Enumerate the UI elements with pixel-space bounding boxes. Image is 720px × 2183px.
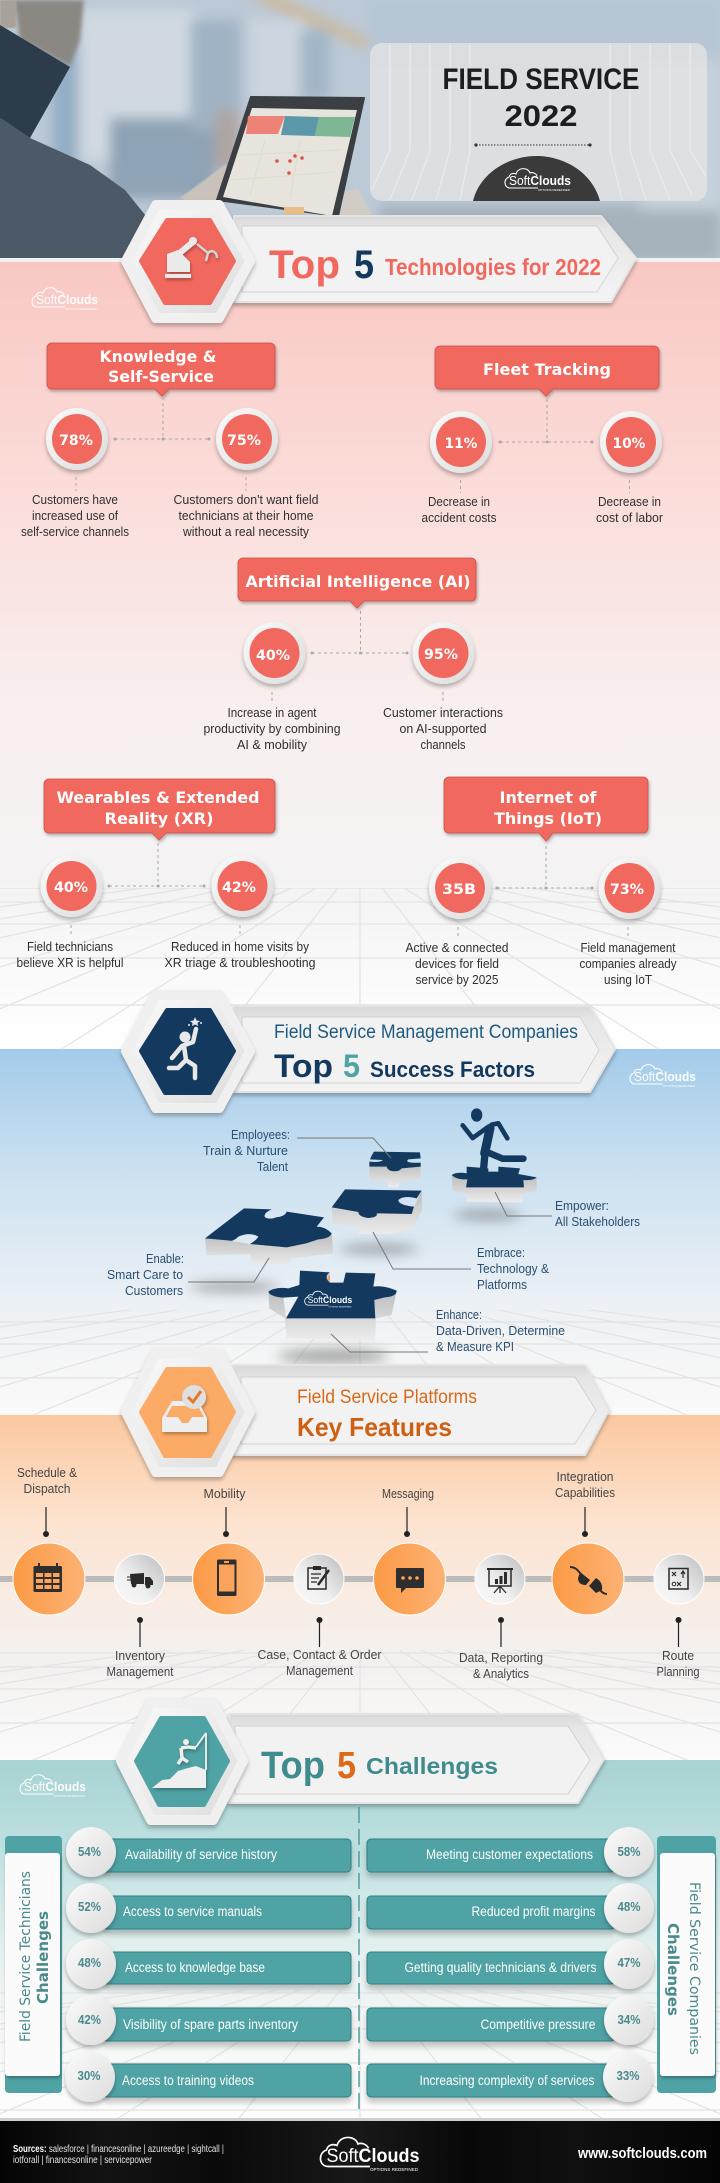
feature: Mobility: Mobility: [204, 1486, 246, 1501]
label: Enable: Enable:: [146, 1251, 184, 1266]
banner: Top 5 Success Factors: [126, 995, 615, 1108]
sources: Sources: salesforce | financesonline | azureedge | sightcall |: [13, 2144, 224, 2155]
label: Enhance: [331, 1307, 565, 1354]
ribbon: Challenges: [366, 1753, 498, 1779]
description 10%: [596, 494, 664, 525]
ribbon: Success Factors: [370, 1057, 535, 1082]
feature: Data, Reporting & Analytics: Data, Reporting: [459, 1650, 543, 1665]
tablet: [217, 97, 364, 216]
technicians challenge 52%: Access to service manuals: [123, 1904, 262, 1919]
stat 11%: [430, 411, 492, 473]
stat 35B: 35B: [442, 882, 476, 898]
feature: Case, Contact & Order Management: Case, Contact & Order: [258, 1647, 382, 1662]
feature: Messaging: [374, 1486, 446, 1615]
shadows: [190, 1210, 521, 1363]
label: Embrace: Embrace:: [477, 1245, 525, 1260]
feature: Case, Contact & Order Management: [258, 1554, 382, 1678]
logo: SoftClouds footer: SoftClouds: [326, 2145, 420, 2167]
label: Enable: Customers: [125, 1283, 183, 1298]
description 11%: [422, 494, 497, 525]
logo on puzzle piece: OPTIONS REDEFINED: [328, 1306, 352, 1308]
sources: [13, 2144, 224, 2166]
description 95%: on AI-supported: [400, 721, 486, 736]
technicians challenge 30%: Access to training videos: [122, 2073, 254, 2088]
companies challenge 34%: 34%: [618, 2012, 641, 2027]
side panel: Field Service Technicians Challenges: Field Service Technicians: [18, 1871, 34, 2042]
feature: Integration Capabilities: Integration: [556, 1469, 614, 1484]
description 73%: [580, 940, 677, 987]
side panel: Field Service Technicians Challenges: [5, 1836, 62, 2093]
description 10%: cost of labor: [596, 510, 664, 525]
label: Embrace: Technology &: [477, 1261, 549, 1276]
stat 40%: [244, 622, 306, 684]
callout heading: Internet of: [500, 788, 598, 807]
logo: SoftClouds section 2: [630, 1065, 696, 1088]
technicians challenge 48%: 48%: [78, 1955, 101, 1970]
logo on puzzle piece: SoftClouds: [308, 1295, 352, 1305]
companies challenge 33%: [367, 2052, 653, 2102]
feature: Inventory Management: Inventory: [115, 1648, 165, 1663]
description 42%: Reduced in home visits by: [171, 939, 309, 954]
description 42%: [164, 939, 316, 970]
ribbon: [234, 216, 636, 302]
side panel: Field Service Companies Challenges: Challenges: [664, 1923, 682, 2016]
label: Enhance: Data-Driven, Determine: [436, 1323, 565, 1338]
hexagon badge with inbox icon: [126, 1353, 250, 1472]
panel: Internet of Things: [406, 777, 677, 987]
companies challenge 48%: Reduced profit margins: [472, 1904, 596, 1919]
feature: Route Planning: [654, 1554, 704, 1679]
companies challenge 33%: Increasing complexity of services: [420, 2073, 595, 2088]
feature: Inventory Management: Management: [106, 1664, 174, 1679]
stat 42%: [212, 855, 274, 917]
logo: SoftClouds section 1: [32, 288, 98, 311]
callout heading: [435, 346, 659, 396]
logo: SoftClouds section 4: SoftClouds: [24, 1779, 86, 1794]
stat 75%: 75%: [227, 433, 261, 449]
feature: Inventory Management: [106, 1554, 174, 1679]
technicians challenge 42%: [66, 1995, 351, 2045]
puzzle piece: Enable: [205, 1208, 333, 1266]
ribbon: Top: [261, 1745, 325, 1787]
companies challenge 58%: [367, 1827, 654, 1877]
feature: Data, Reporting & Analytics: & Analytics: [473, 1666, 529, 1681]
description 35B: Active & connected: [406, 940, 508, 955]
callout heading: Wearables & Extended: [56, 788, 260, 807]
feature: Integration Capabilities: Capabilities: [555, 1485, 615, 1500]
callout heading: Self-Service: [108, 367, 214, 386]
center dashed divider: [358, 1807, 360, 2112]
stat 10%: 10%: [612, 436, 646, 452]
callout heading: Things (IoT): [494, 809, 602, 828]
feature: Data, Reporting & Analytics: [459, 1554, 543, 1681]
side panel: Field Service Companies Challenges: [657, 1836, 716, 2093]
description 78%: increased use of: [32, 508, 118, 523]
companies challenge 48%: 48%: [618, 1899, 641, 1914]
label: Employees: Talent: [257, 1159, 288, 1174]
callout heading: [238, 558, 476, 608]
puzzle piece: Empower with running figure: [452, 1108, 537, 1203]
ribbon: Key Features: [297, 1412, 452, 1442]
person: [0, 0, 372, 258]
feature: Case, Contact & Order Management: Management: [286, 1663, 353, 1678]
companies challenge 34%: [367, 1995, 654, 2045]
stat 78%: 78%: [59, 433, 93, 449]
feature: Schedule & Dispatch: [13, 1465, 85, 1615]
technicians challenge 48%: [66, 1939, 351, 1989]
logo: SoftClouds section 1: SoftClouds: [36, 292, 98, 307]
feature: Route Planning: Planning: [656, 1664, 700, 1679]
stat 73%: 73%: [610, 882, 644, 898]
panel: Artificial Intelligence: [204, 558, 503, 752]
stat 10%: [600, 411, 662, 473]
technicians challenge 30%: [65, 2052, 351, 2102]
ribbon: Field Service Management Companies: [274, 1022, 578, 1043]
label: Enable: Smart Care to: [107, 1267, 183, 1282]
technicians challenge 54%: [66, 1827, 351, 1877]
companies challenge 58%: Meeting customer expectations: [426, 1847, 593, 1862]
callout heading: [444, 777, 648, 841]
description 35B: devices for field: [415, 956, 499, 971]
stat 78%: [46, 408, 108, 470]
icon: route map: [669, 1568, 688, 1589]
puzzle piece: Employees: [369, 1152, 421, 1187]
companies challenge 47%: Getting quality technicians & drivers: [404, 1960, 597, 1975]
logo: SoftClouds: [505, 169, 571, 192]
banner: Key Features: [126, 1353, 609, 1472]
description 11%: accident costs: [422, 510, 497, 525]
logo: SoftClouds footer: [320, 2137, 420, 2172]
panel: Fleet Tracking: [422, 346, 664, 525]
description 73%: Field management: [580, 940, 676, 955]
description 35B: [406, 940, 508, 987]
description 40%: [16, 939, 124, 970]
companies challenge 34%: Competitive pressure: [480, 2017, 596, 2032]
stat 40%: [40, 855, 102, 917]
banner: Top 5 Technologies for 2022: [126, 205, 636, 318]
callout heading: Reality (XR): [104, 809, 214, 828]
description 40%: Increase in agent: [228, 705, 317, 720]
panel: Wearables & Extended Reality: [16, 779, 316, 970]
ribbon: Technologies for 2022: [385, 254, 601, 280]
label: Embrace: Platforms: [477, 1277, 527, 1292]
logo: SoftClouds section 4: OPTIONS REDEFINED: [53, 1794, 86, 1798]
ribbon: Top: [274, 1048, 333, 1084]
label: Employees: Train & Nurture: [203, 1143, 288, 1158]
stat 95%: 95%: [424, 647, 458, 663]
label: Embrace: [373, 1232, 549, 1292]
description 73%: using IoT: [604, 972, 652, 987]
puzzle piece: Embrace: [332, 1189, 422, 1234]
technicians challenge 42%: Visibility of spare parts inventory: [123, 2017, 298, 2032]
ribbon: 5: [337, 1745, 356, 1787]
description 40%: AI & mobility: [237, 737, 307, 752]
logo: SoftClouds section 2: SoftClouds: [634, 1069, 696, 1084]
description 40%: [204, 705, 340, 752]
hexagon badge with reaching figure icon: [126, 995, 250, 1108]
callout heading: Fleet Tracking: [483, 360, 611, 379]
description 40%: Field technicians: [27, 939, 113, 954]
puzzle piece: Enhance: [268, 1271, 397, 1340]
icon: presentation board: [487, 1569, 513, 1593]
ribbon: 5: [354, 243, 374, 287]
logo: SoftClouds section 1: OPTIONS REDEFINED: [65, 307, 98, 311]
description 78%: Customers have: [32, 492, 118, 507]
feature: Route Planning: Route: [662, 1648, 694, 1663]
ribbon: [234, 1365, 609, 1455]
logo: SoftClouds section 2: OPTIONS REDEFINED: [663, 1084, 696, 1088]
stat 95%: [412, 622, 474, 684]
callout heading: Knowledge &: [100, 347, 217, 366]
icon: clipboard: [308, 1566, 329, 1589]
ribbon: [229, 1714, 604, 1803]
stat 11%: 11%: [444, 436, 478, 452]
label: Enable: [107, 1251, 269, 1298]
callout heading: Artificial Intelligence (AI): [246, 572, 470, 591]
label: Empower: All Stakeholders: [555, 1214, 640, 1229]
description 40%: believe XR is helpful: [16, 955, 124, 970]
ribbon: 5: [343, 1048, 360, 1084]
stat 75%: [216, 408, 278, 470]
stat 73%: [598, 857, 660, 919]
side panel: Field Service Technicians Challenges: Challenges: [34, 1911, 52, 2004]
icon: chat bubble: [396, 1568, 424, 1593]
stat 42%: 42%: [222, 880, 256, 896]
technicians challenge 52%: 52%: [78, 1899, 101, 1914]
description 11%: Decrease in: [428, 494, 490, 509]
panel: Knowledge & Self-Service: [21, 343, 318, 539]
icon: calendar: [34, 1563, 62, 1592]
description 75%: [174, 492, 318, 539]
label: Empower: [495, 1192, 640, 1229]
label: Employees: [203, 1127, 391, 1174]
ribbon: Field Service Platforms: [297, 1387, 477, 1408]
companies challenge 47%: [367, 1939, 654, 1989]
title panel: Field Service 2022: FIELD SERVICE: [442, 63, 640, 96]
description 75%: technicians at their home: [178, 508, 314, 523]
description 73%: companies already: [580, 956, 677, 971]
feature: Schedule & Dispatch: Schedule &: [17, 1465, 77, 1480]
description 10%: Decrease in: [598, 494, 661, 509]
feature: Messaging: Messaging: [382, 1486, 434, 1501]
hexagon badge with robot arm icon: [126, 205, 250, 318]
description 40%: productivity by combining: [204, 721, 340, 736]
companies challenge 47%: 47%: [618, 1955, 641, 1970]
timeline bar: [0, 1576, 720, 1582]
hexagon badge with climber icon: [121, 1703, 243, 1820]
description 78%: self-service channels: [21, 524, 129, 539]
ribbon: [234, 1006, 615, 1092]
icon: delivery truck: [127, 1573, 153, 1588]
ribbon: Top: [269, 243, 340, 287]
feature: Integration Capabilities: [552, 1469, 624, 1615]
description 75%: without a real necessity: [182, 524, 309, 539]
icon: plug: [570, 1567, 607, 1594]
feature: Mobility: [192, 1486, 264, 1615]
logo: SoftClouds: OPTIONS REDEFINED: [538, 188, 571, 192]
title panel: Field Service 2022: [370, 43, 707, 201]
technicians challenge 54%: Availability of service history: [125, 1847, 277, 1862]
icon: smartphone: [217, 1560, 236, 1596]
description 35B: service by 2025: [416, 972, 498, 987]
companies challenge 33%: 33%: [616, 2068, 640, 2083]
banner: Top 5 Challenges: [121, 1703, 604, 1820]
footer: [0, 2118, 720, 2183]
description 78%: [21, 492, 129, 539]
description 42%: XR triage & troubleshooting: [164, 955, 316, 970]
header photo: technician with tablet: [0, 0, 720, 260]
label: Enhance: & Measure KPI: [436, 1339, 514, 1354]
puzzle illustration: success factors: [190, 1108, 537, 1363]
description 95%: Customer interactions: [383, 705, 503, 720]
label: Employees: Employees:: [231, 1127, 290, 1142]
technicians challenge 42%: 42%: [78, 2012, 101, 2027]
companies challenge 58%: 58%: [618, 1844, 641, 1859]
sources: iotforall | financesonline | servicepower: [13, 2155, 153, 2166]
logo: SoftClouds footer: OPTIONS REDEFINED: [370, 2167, 419, 2172]
logo on puzzle piece: [305, 1291, 352, 1308]
side panel: Field Service Companies Challenges: Field Service Companies: [686, 1882, 702, 2055]
stat 35B: [429, 857, 491, 919]
companies challenge 48%: [367, 1883, 654, 1933]
logo: SoftClouds section 4: [20, 1775, 86, 1798]
callout heading: [44, 779, 275, 840]
callout heading: [47, 343, 275, 396]
logo: SoftClouds: SoftClouds: [509, 173, 571, 188]
description 75%: Customers don't want field: [174, 492, 318, 507]
description 95%: channels: [420, 737, 466, 752]
description 95%: [383, 705, 503, 752]
technicians challenge 30%: 30%: [78, 2068, 101, 2083]
divider under header: [0, 258, 720, 262]
feature: Schedule & Dispatch: Dispatch: [24, 1481, 70, 1496]
title panel: Field Service 2022: 2022: [504, 100, 578, 133]
stat 40%: 40%: [54, 880, 88, 896]
label: Enhance: Enhance:: [436, 1307, 482, 1322]
label: Empower: Empower:: [555, 1198, 609, 1213]
stat 40%: 40%: [256, 648, 290, 664]
technicians challenge 54%: 54%: [78, 1844, 101, 1859]
technicians challenge 48%: Access to knowledge base: [125, 1960, 265, 1975]
technicians challenge 52%: [66, 1883, 351, 1933]
